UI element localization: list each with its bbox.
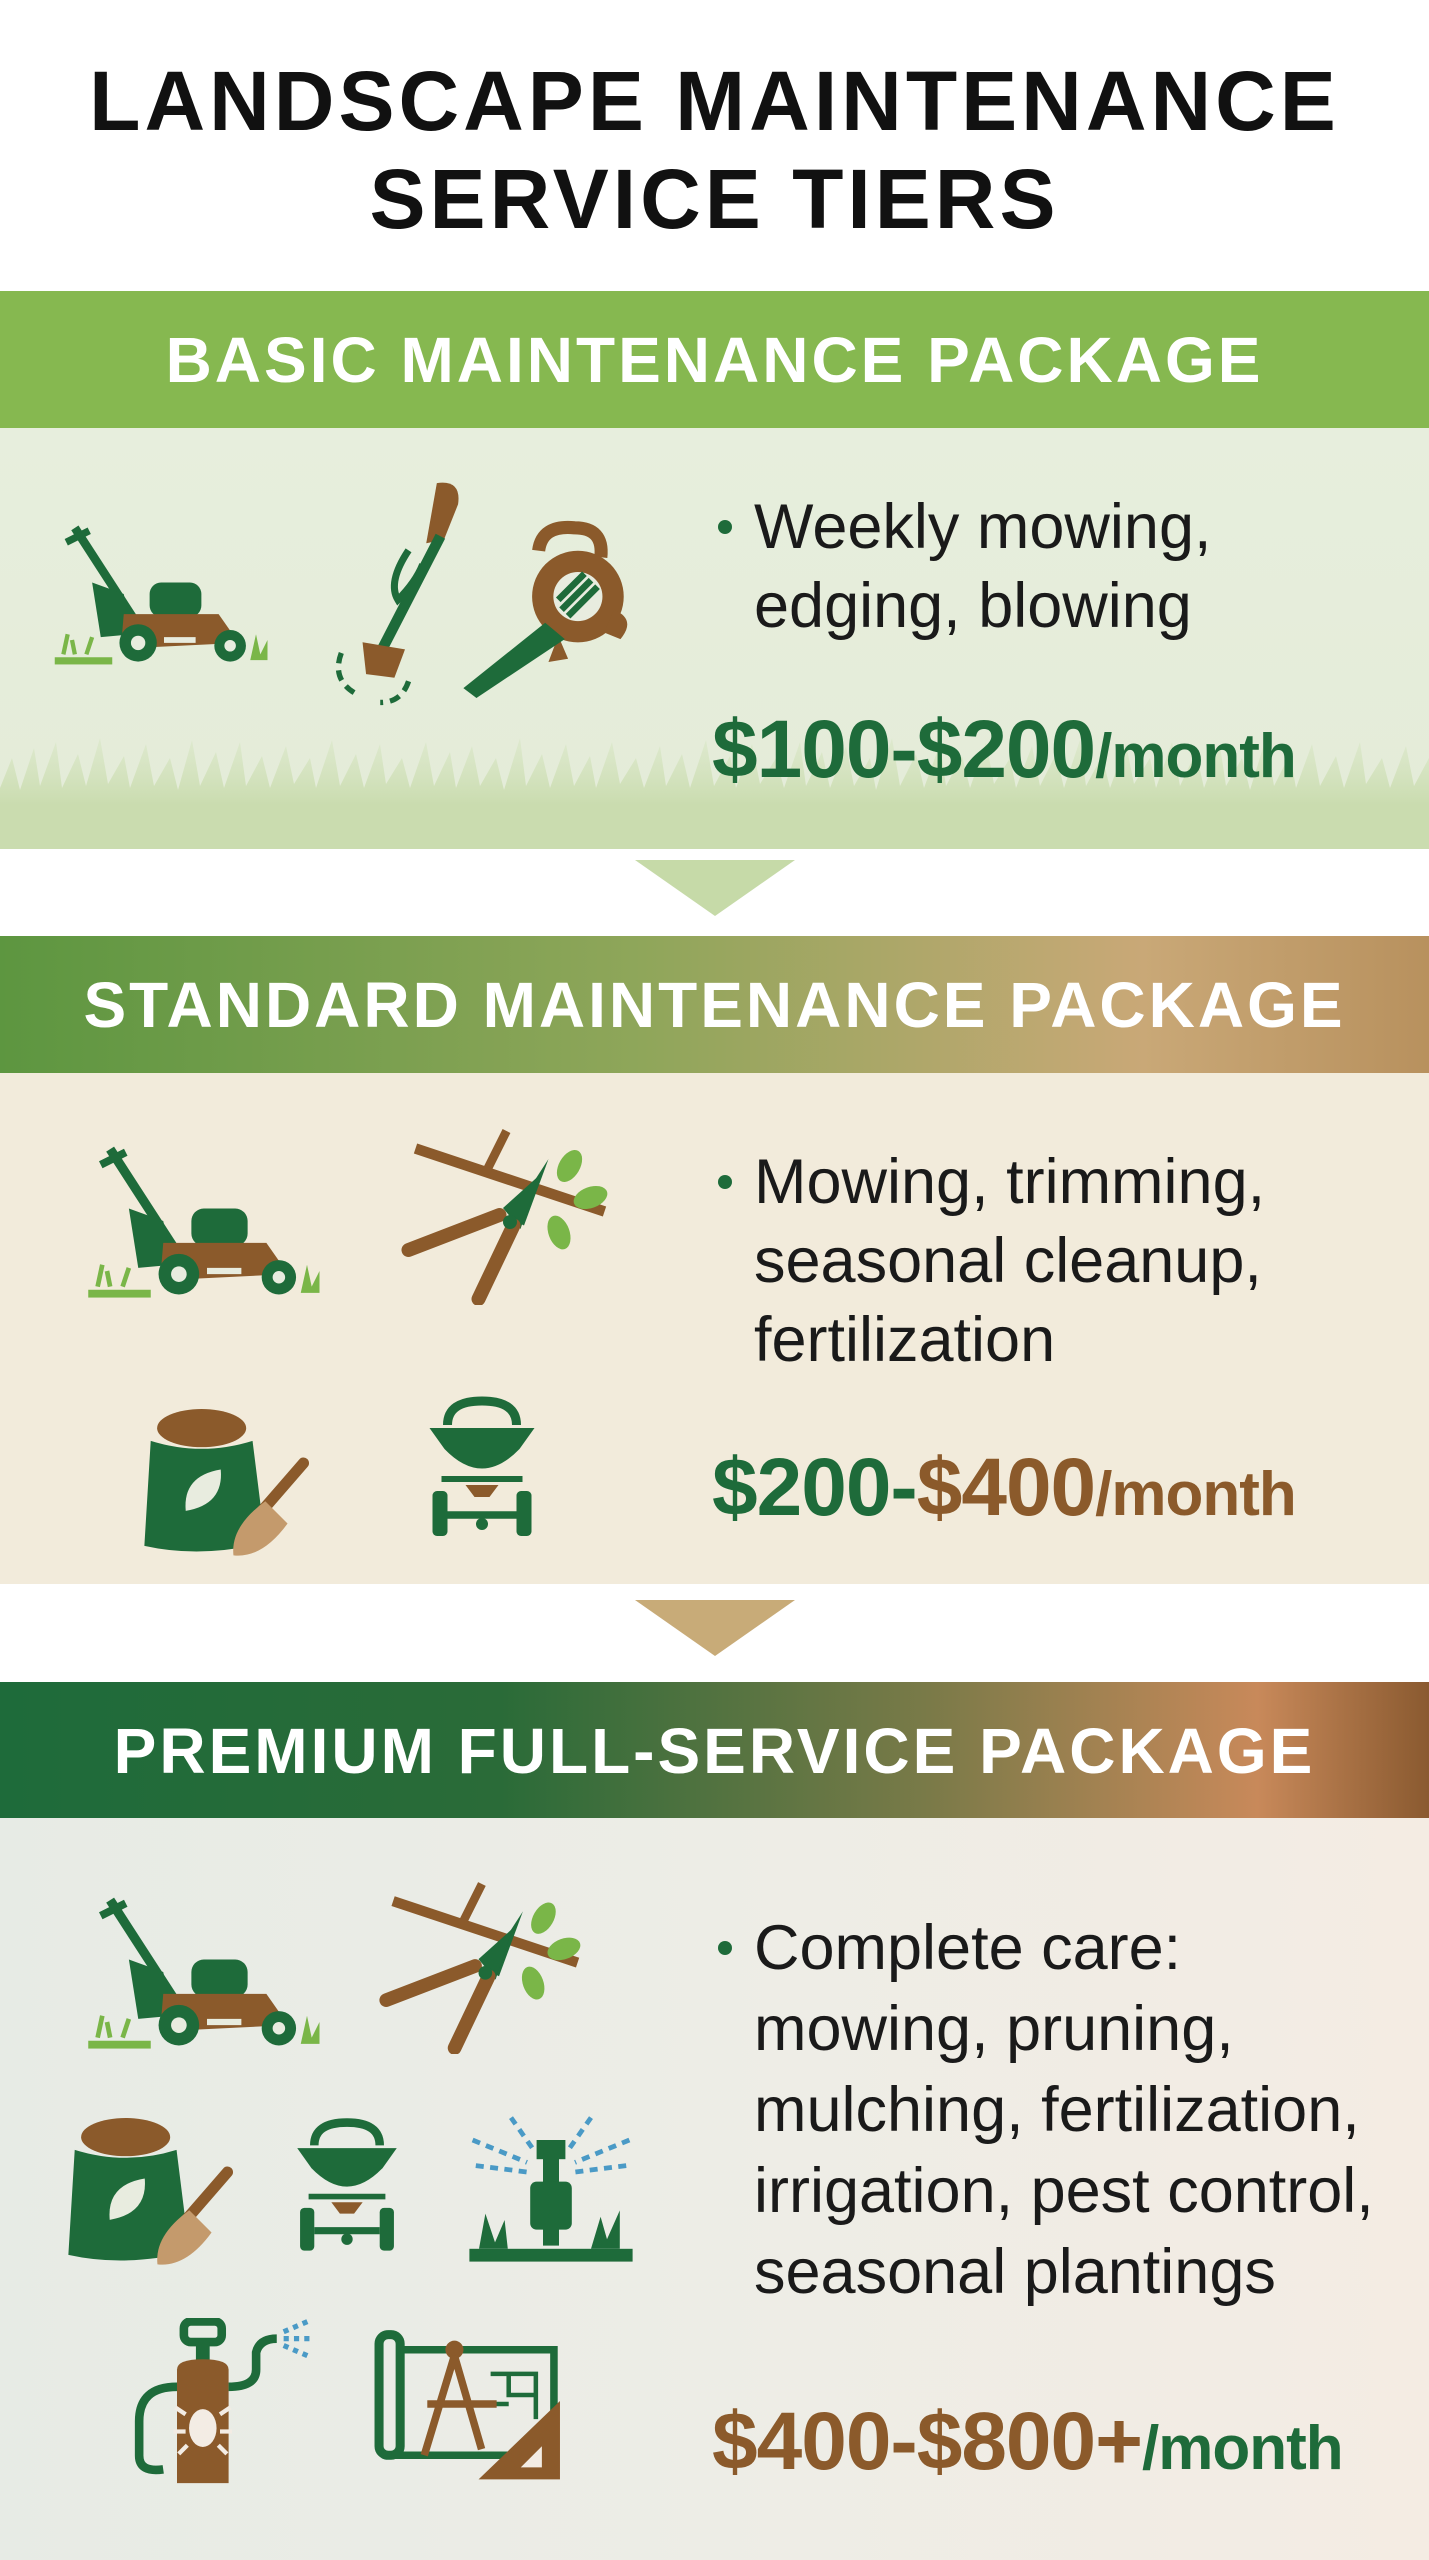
icon: lawn mower <box>88 1146 320 1298</box>
title: LANDSCAPE MAINTENANCE <box>89 54 1340 148</box>
icon: string trimmer <box>336 482 458 706</box>
title: SERVICE TIERS <box>370 152 1059 246</box>
price: premium: $400-$800+/month <box>712 2396 1343 2487</box>
text: basic services: edging, blowing <box>754 571 1192 641</box>
price: basic: $100-$200/month <box>712 704 1296 795</box>
icon: pest sprayer <box>134 2318 310 2484</box>
arrow: basic to standard <box>635 860 795 916</box>
header: standard package <box>0 936 1429 1073</box>
text: premium services: Complete care: <box>754 1913 1181 1983</box>
text: basic services <box>718 492 1212 641</box>
grass background <box>0 739 1429 849</box>
panel: basic <box>0 428 1429 849</box>
header: basic package: BASIC MAINTENANCE PACKAGE <box>166 324 1263 396</box>
text: premium services: mowing, pruning, <box>754 1994 1234 2064</box>
panel: premium <box>0 1818 1429 2560</box>
text: premium services: mulching, fertilization, <box>754 2075 1360 2145</box>
text: premium services: seasonal plantings <box>754 2237 1276 2307</box>
text: premium services: irrigation, pest control, <box>754 2156 1374 2226</box>
panel: standard <box>0 1073 1429 1584</box>
text: basic services: Weekly mowing, <box>754 492 1212 562</box>
header: basic package <box>0 291 1429 428</box>
icon: leaf blower <box>463 520 628 698</box>
header: premium package: PREMIUM FULL-SERVICE PACKAGE <box>114 1714 1315 1786</box>
text: standard services: fertilization <box>754 1305 1055 1375</box>
icon: pruning shears <box>379 1882 580 2054</box>
text: standard services <box>718 1147 1265 1375</box>
icon: soil bag and trowel <box>68 2118 233 2265</box>
icon: sprinkler <box>469 2116 633 2262</box>
text: standard services: Mowing, trimming, <box>754 1147 1265 1217</box>
icon: pruning shears <box>402 1129 608 1305</box>
text: premium services <box>718 1913 1374 2307</box>
arrow: standard to premium <box>635 1600 795 1656</box>
title <box>89 54 1340 246</box>
header: standard package: STANDARD MAINTENANCE PACKAGE <box>83 968 1346 1040</box>
icon: lawn mower <box>88 1898 320 2049</box>
icon: lawn mower <box>54 526 268 664</box>
icon: fertilizer spreader <box>430 1396 534 1536</box>
price: standard: $200-$400/month <box>712 1442 1296 1533</box>
icon: landscape blueprint <box>374 2330 560 2480</box>
icon: fertilizer spreader <box>297 2118 397 2251</box>
icon: soil bag and trowel <box>144 1409 309 1556</box>
header: premium package <box>0 1682 1429 1819</box>
text: standard services: seasonal cleanup, <box>754 1226 1262 1296</box>
